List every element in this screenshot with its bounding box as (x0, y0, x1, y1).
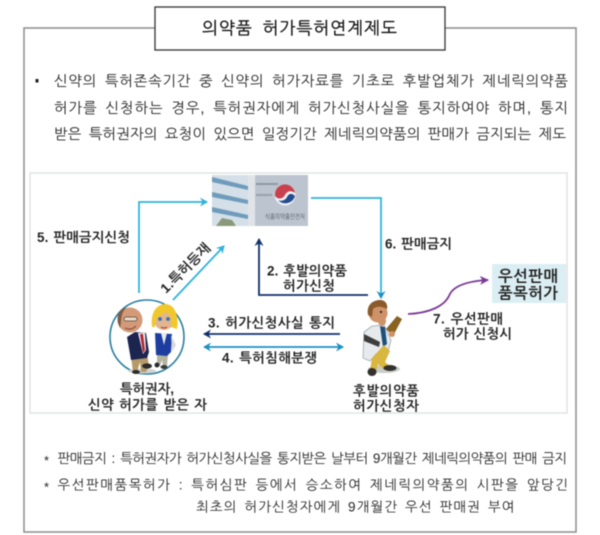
arrow 4 left head (203, 342, 211, 352)
title box (155, 7, 445, 50)
footnotes text block: * (44, 480, 49, 494)
footnotes text block: 판매금지 : 특허권자가 허가신청사실을 통지받은 날부터 9개월간 제네릭의약품의 판매 금지 (58, 451, 567, 466)
label: generic applicant: 후발의약품 (353, 384, 419, 398)
label 5: 5. 판매금지신청 (37, 230, 130, 245)
callout: priority sale approval: 품목허가 (498, 284, 558, 302)
label 7 (433, 312, 512, 342)
label: patent holder: 신약 허가를 받은 자 (88, 398, 207, 412)
intro text block: 받은 특허권자의 요청이 있으면 일정기간 제네릭의약품의 판매가 금지되는 제도 (54, 126, 566, 143)
icon: patent holders in circle (110, 300, 184, 374)
icon: agency building photo: 식품의약품안전처 (265, 213, 305, 221)
arrow 1: patent listing (173, 246, 224, 300)
label 6: 6. 판매금지 (385, 236, 452, 252)
icon: agency building photo (212, 175, 308, 226)
label 7: 허가 신청시 (443, 326, 512, 342)
arrow 3: notification (204, 333, 340, 335)
title box: 의약품 허가특허연계제도 (202, 19, 397, 38)
footnotes text block: * (44, 453, 49, 468)
label 1: 1.특허등재 (158, 240, 213, 296)
label: generic applicant: 허가신청자 (353, 398, 419, 414)
label 2: 2. 후발의약품 (267, 264, 347, 278)
arrow 5: sale ban request (139, 202, 207, 293)
intro text block (36, 73, 568, 143)
label: patent holder (88, 382, 207, 412)
footnotes text block: 우선판매품목허가 : 특허심판 등에서 승소하여 제네릭의약품의 시판을 앞당긴 (58, 478, 568, 492)
label 3: 3. 허가신청사실 통지 (208, 316, 335, 330)
label: patent holder: 특허권자, (120, 382, 174, 396)
footnotes text block (44, 451, 568, 514)
label 2 (267, 264, 347, 294)
callout: priority sale approval: 우선판매 (498, 268, 558, 286)
label 7: 7. 우선판매 (433, 312, 503, 326)
label 4: 4. 특허침해분쟁 (222, 350, 317, 366)
icon: generic applicant doctor (363, 300, 402, 376)
callout: priority sale approval (492, 264, 566, 303)
arrow 2: generic application (259, 239, 368, 295)
diagram panel (30, 173, 567, 414)
arrow 7: priority sale curve (408, 280, 488, 314)
intro text block: 신약의 특허존속기간 중 신약의 허가자료를 기초로 후발업체가 제네릭의약품 (54, 73, 568, 90)
label 2: 허가신청 (283, 278, 335, 294)
label: generic applicant (353, 384, 419, 414)
arrow 6: sale ban (311, 198, 381, 298)
footnotes text block: 최초의 허가신청자에게 9개월간 우선 판매권 부여 (196, 500, 514, 514)
arrow 4: patent dispute (206, 346, 343, 348)
intro text block: 허가를 신청하는 경우, 특허권자에게 허가신청사실을 통지하여야 하며, 통지 (54, 100, 568, 117)
